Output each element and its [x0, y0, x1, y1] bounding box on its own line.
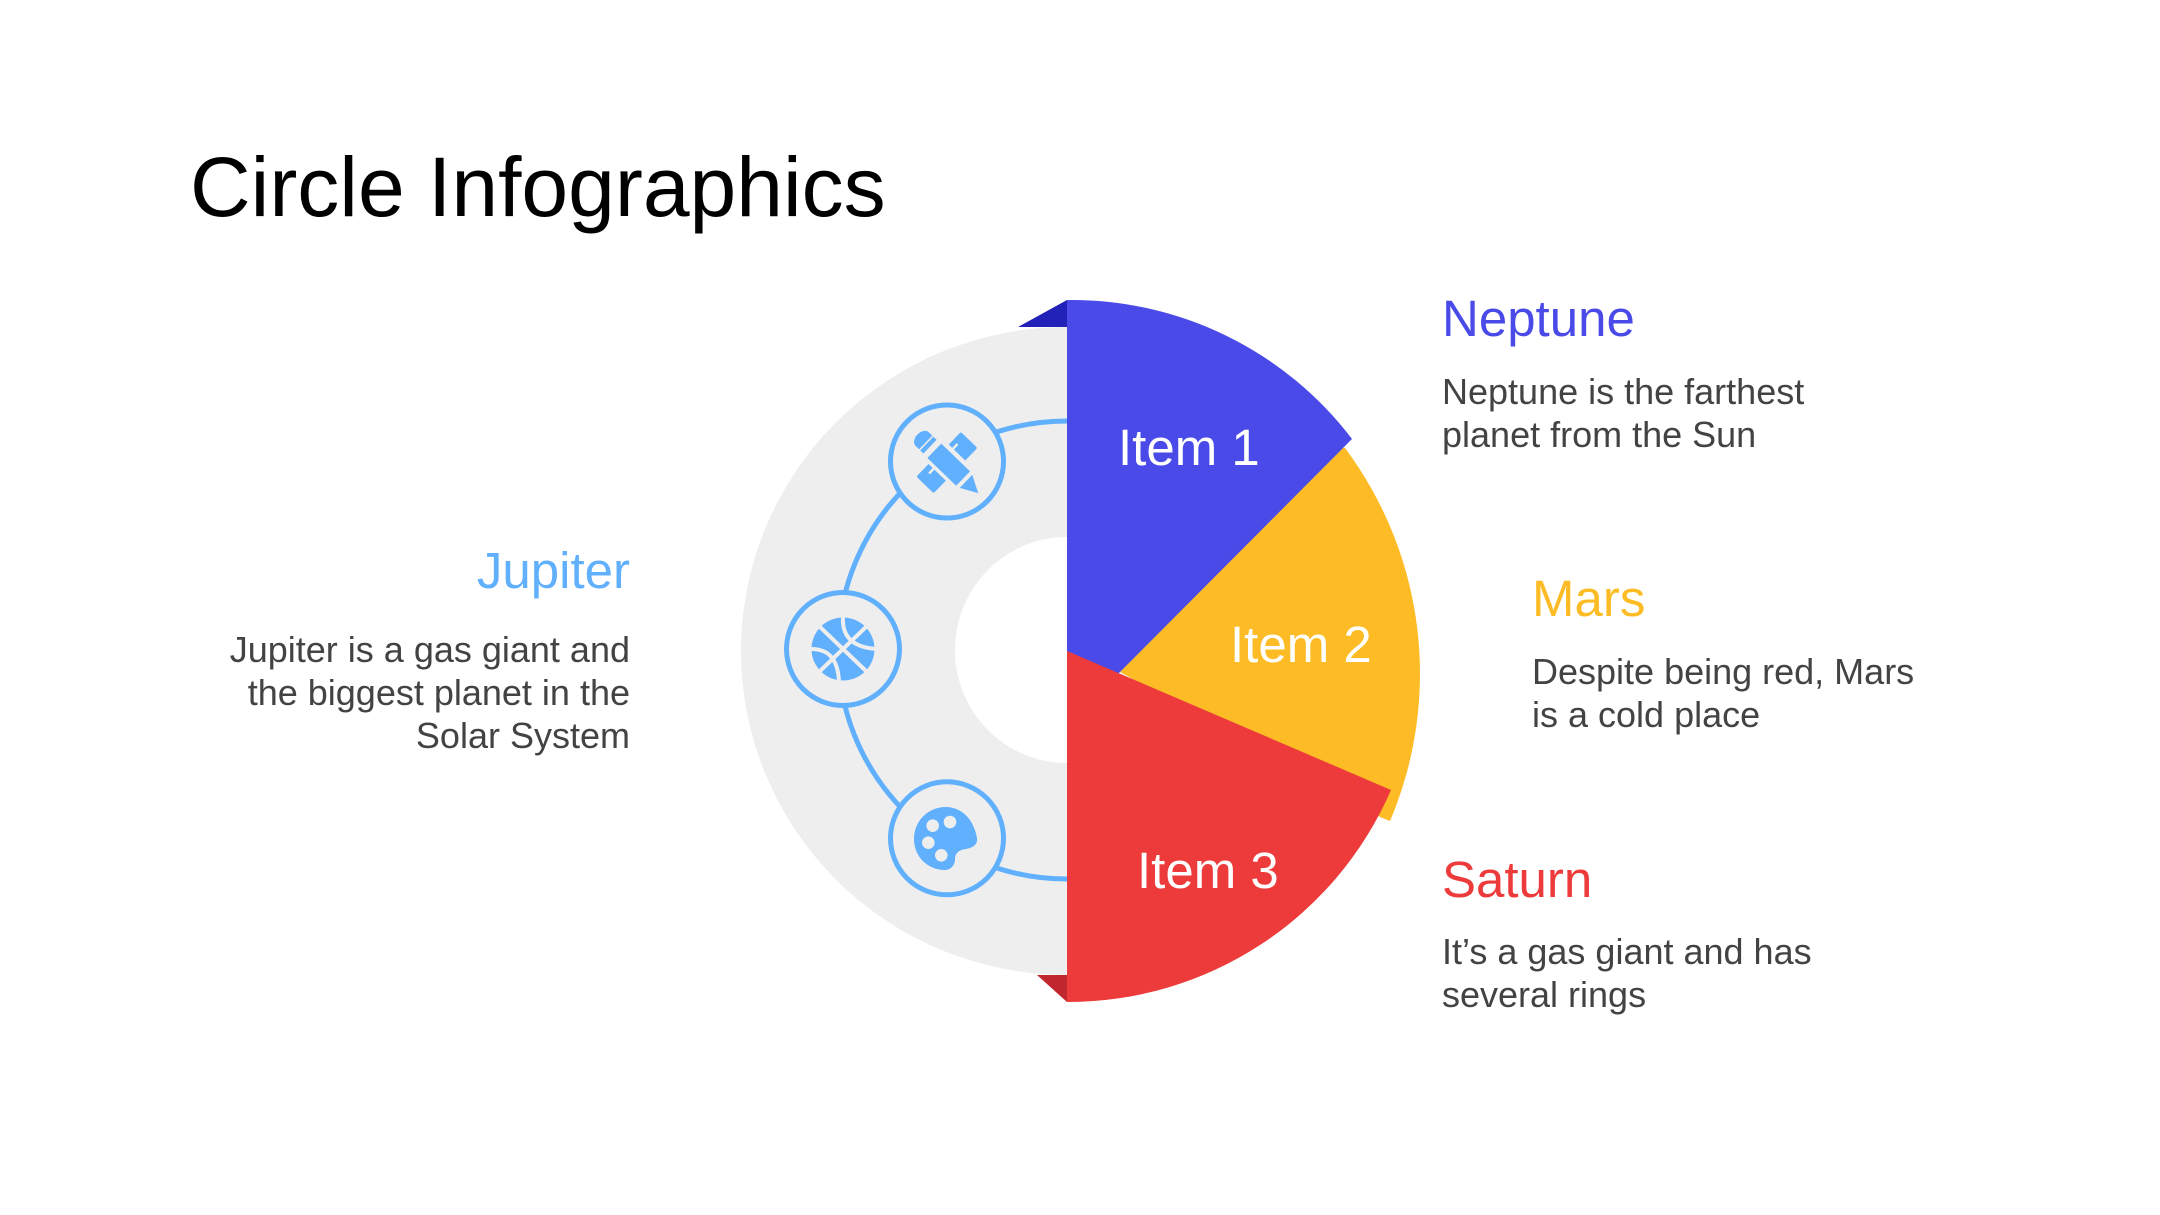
text block: Jupiter: Jupiter	[477, 542, 630, 599]
dark red fold	[1037, 975, 1067, 1002]
panel: circle diagram	[741, 300, 1420, 1002]
text block: Jupiter: Jupiter is a gas giant and	[230, 629, 630, 670]
text block: Neptune	[1442, 290, 1804, 455]
icon: pencil and ruler	[890, 405, 1004, 518]
blue segment	[1067, 300, 1352, 676]
red segment	[1067, 651, 1391, 1002]
text block: Neptune: Neptune is the farthest	[1442, 371, 1804, 412]
text block: Saturn	[1442, 851, 1812, 1015]
icon: basketball	[786, 592, 900, 706]
yellow segment	[1120, 447, 1420, 821]
title: Circle Infographics	[190, 140, 886, 234]
text block: Mars	[1532, 570, 1914, 735]
text block: Mars: is a cold place	[1532, 694, 1760, 735]
dark blue fold	[1018, 300, 1067, 327]
text block: Jupiter: the biggest planet in the	[248, 672, 630, 713]
label: item 1: Item 1	[1118, 419, 1260, 476]
text block: Mars: Despite being red, Mars	[1532, 651, 1914, 692]
gray half ring	[741, 327, 1067, 975]
connecting arc	[838, 421, 1067, 879]
label: item 2: Item 2	[1230, 616, 1372, 673]
text block: Jupiter: Solar System	[416, 715, 630, 756]
text block: Saturn: Saturn	[1442, 851, 1592, 908]
text block: Saturn: It’s a gas giant and has	[1442, 931, 1812, 972]
text block: Jupiter	[230, 542, 630, 756]
icon: palette	[890, 782, 1004, 895]
text block: Mars: Mars	[1532, 570, 1645, 627]
text block: Saturn: several rings	[1442, 974, 1646, 1015]
text block: Neptune: Neptune	[1442, 290, 1635, 347]
label: item 3: Item 3	[1137, 842, 1279, 899]
text block: Neptune: planet from the Sun	[1442, 414, 1756, 455]
